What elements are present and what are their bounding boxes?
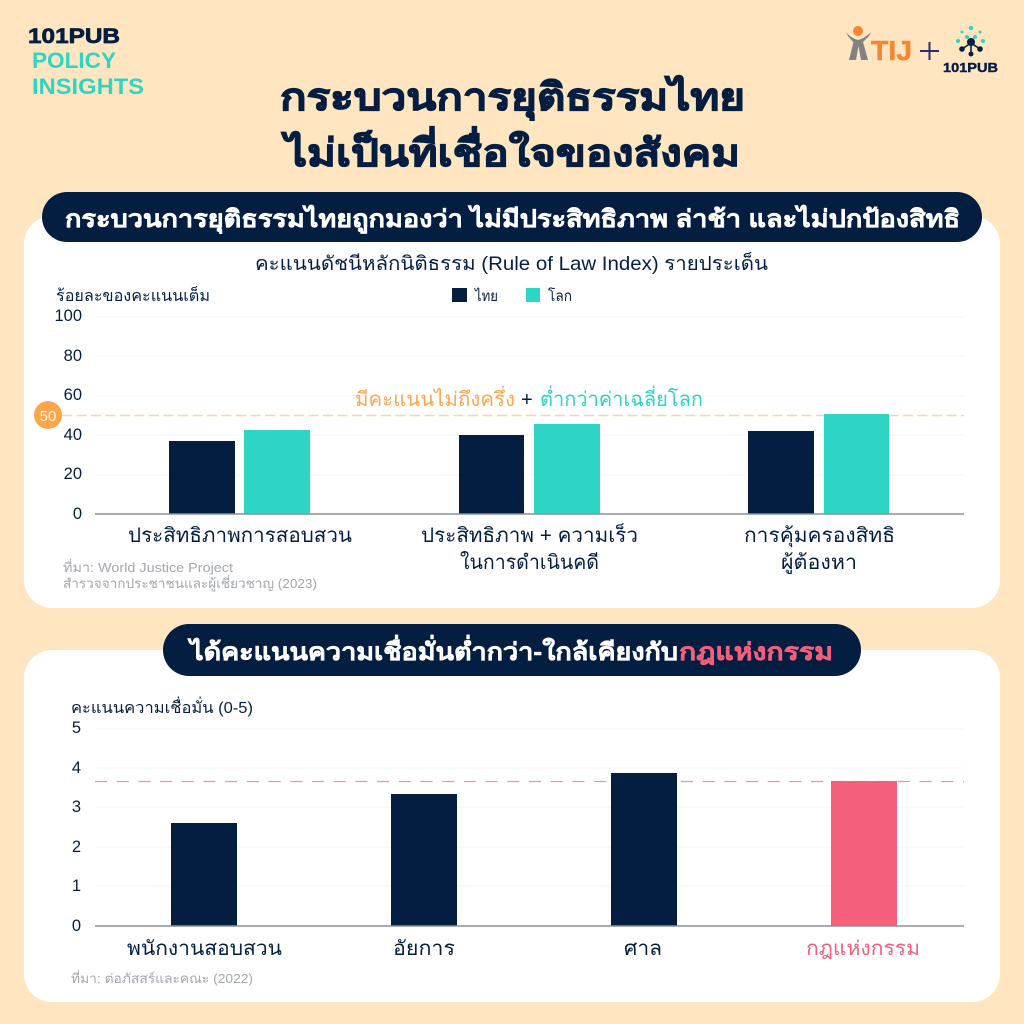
- legend: [452, 287, 572, 305]
- icon: TIJ figure: [846, 26, 871, 60]
- category labels: การคุ้มครองสิทธิ: [744, 525, 895, 548]
- bar chart: Rule of Law: [54, 307, 964, 523]
- panel header pill 1: [42, 192, 982, 242]
- title: กระบวนการยุติธรรมไทย: [280, 75, 745, 121]
- category labels: ประสิทธิภาพการสอบสวน: [128, 525, 352, 547]
- panel: confidence chart: [24, 650, 1000, 1002]
- brand block: 101PUB Policy Insights: POLICY: [32, 48, 116, 73]
- bar chart: Rule of Law: 100: [54, 307, 82, 325]
- bar chart: Rule of Law: 40: [64, 426, 82, 444]
- bar chart: Rule of Law: 20: [64, 465, 82, 483]
- legend: ไทย: [474, 287, 498, 305]
- bar chart: confidence: [72, 719, 964, 935]
- bar chart: confidence: 3: [72, 798, 81, 816]
- bar chart: Rule of Law: 60: [64, 386, 82, 404]
- y axis title: ร้อยละของคะแนนเต็ม: [56, 285, 210, 305]
- category labels: อัยการ: [393, 938, 455, 960]
- title: ไม่เป็นที่เชื่อใจของสังคม: [280, 126, 740, 175]
- bar chart: confidence: 2: [72, 838, 81, 856]
- panel header pill 2: [163, 624, 861, 676]
- category labels: ในการดำเนินคดี: [460, 551, 599, 574]
- bar chart: Rule of Law: 80: [64, 347, 82, 365]
- category labels: ผู้ต้องหา: [781, 552, 857, 575]
- category labels: [128, 522, 895, 575]
- chart subtitle: คะแนนดัชนีหลักนิติธรรม (Rule of Law Index) รายประเด็น: [255, 251, 768, 275]
- bar chart: confidence: 4: [72, 759, 81, 777]
- marker: 50: [34, 401, 62, 429]
- legend: โลก: [548, 287, 572, 305]
- panel header pill 2: กฎแห่งกรรม: [679, 639, 833, 666]
- bar chart: confidence: 0: [72, 917, 81, 935]
- category labels: ประสิทธิภาพ + ความเร็ว: [421, 522, 638, 547]
- panel header pill 1: กระบวนการยุติธรรมไทยถูกมองว่า ไม่มีประสิทธิภาพ ล่าช้า และไม่ปกป้องสิทธิ: [65, 204, 960, 235]
- source note: สำรวจจากประชาชนและผู้เชี่ยวชาญ (2023): [63, 575, 317, 592]
- icon: 101PUB network: [956, 26, 985, 56]
- panel header pill 2: ได้คะแนนความเชื่อมั่นต่ำกว่า-ใกล้เคียงกับ: [187, 634, 678, 666]
- logo text: TIJ: TIJ: [871, 35, 912, 66]
- category labels: กฎแห่งกรรม: [806, 938, 920, 960]
- category labels: [127, 938, 920, 960]
- bar chart: confidence: 1: [72, 877, 81, 895]
- brand block: 101PUB Policy Insights: 101PUB: [28, 25, 120, 48]
- annotation: ต่ำกว่าค่าเฉลี่ยโลก: [540, 385, 703, 411]
- annotation: [355, 385, 703, 411]
- logo text: 101PUB: 101PUB: [943, 60, 998, 75]
- logos: TIJ + 101PUB: [846, 26, 998, 75]
- icon: plus: [920, 42, 939, 60]
- category labels: ศาล: [624, 938, 662, 960]
- annotation: +: [521, 389, 533, 411]
- bar chart: confidence: 5: [72, 719, 81, 737]
- marker: 50: 50: [40, 408, 56, 425]
- source note: [63, 559, 317, 592]
- bar chart: Rule of Law: 0: [73, 505, 82, 523]
- title: [280, 75, 745, 175]
- annotation: มีคะแนนไม่ถึงครึ่ง: [355, 385, 515, 411]
- y axis title: คะแนนความเชื่อมั่น (0-5): [71, 696, 253, 717]
- brand block: 101PUB Policy Insights: INSIGHTS: [32, 74, 144, 99]
- source note: ที่มา: ต่อภัสสร์และคณะ (2022): [71, 970, 253, 986]
- panel: Rule of Law chart: [24, 216, 1000, 608]
- brand block: 101PUB Policy Insights: [28, 25, 144, 99]
- source note: ที่มา: World Justice Project: [63, 559, 233, 575]
- category labels: พนักงานสอบสวน: [127, 938, 282, 960]
